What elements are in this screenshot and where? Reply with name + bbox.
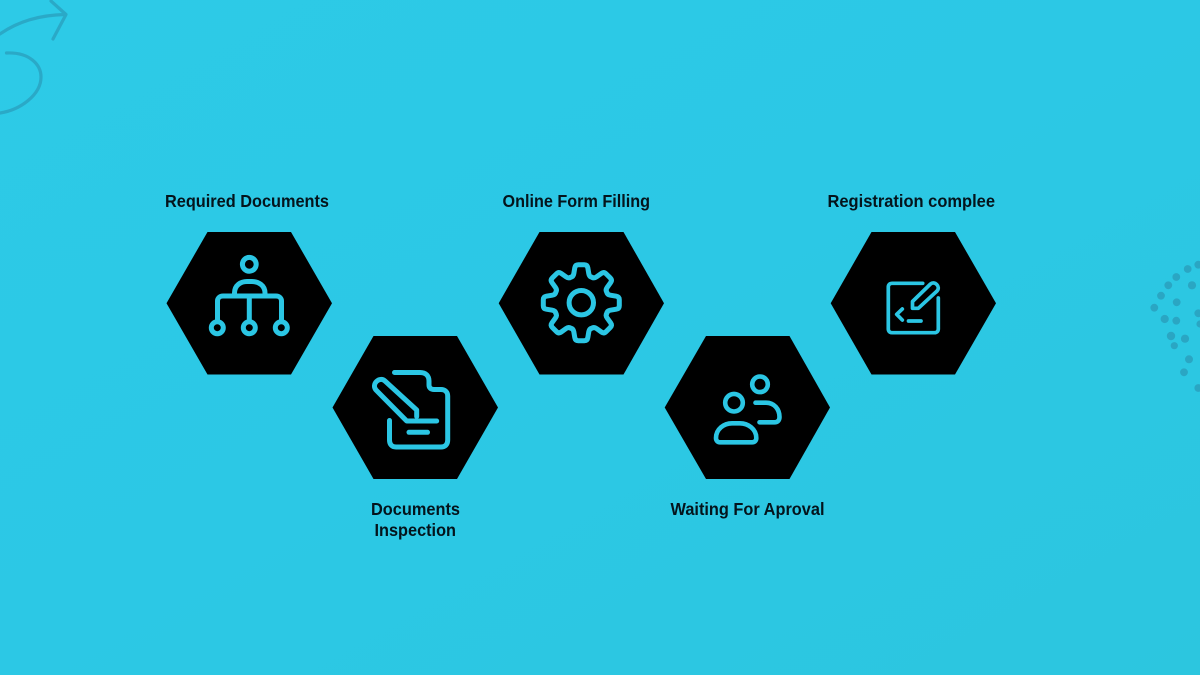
icon: document with pen (374, 372, 448, 447)
step 1: Required Documents (165, 191, 332, 374)
heading: Online Form Filling: Online Form Filling (502, 191, 650, 211)
heading: Documents Inspection: Inspection (374, 520, 456, 540)
hexagon 2 (332, 336, 498, 479)
hexagon 1 (166, 232, 332, 374)
decoration: curved arrow (0, 1, 66, 113)
icon: two users (716, 376, 780, 442)
heading: Waiting For Aproval: Waiting For Aproval (670, 499, 824, 519)
heading: Documents Inspection (371, 499, 460, 540)
hexagon 3 (499, 232, 664, 374)
hexagon 5 (831, 232, 996, 374)
heading: Registration complee: Registration complee (828, 191, 995, 211)
step 3: Online Form Filling (499, 191, 664, 374)
step 4: Waiting For Aproval (665, 336, 830, 519)
icon: edit box (888, 283, 938, 333)
heading: Required Documents: Required Documents (165, 191, 329, 211)
step 2: Documents Inspection (332, 336, 498, 479)
decoration: dots (1150, 261, 1200, 392)
heading: Documents Inspection: Documents (371, 499, 460, 519)
icon: gear (543, 265, 619, 341)
step 5: Registration complee (828, 191, 996, 374)
hexagon 4 (665, 336, 830, 479)
icon: hierarchy (211, 257, 287, 334)
